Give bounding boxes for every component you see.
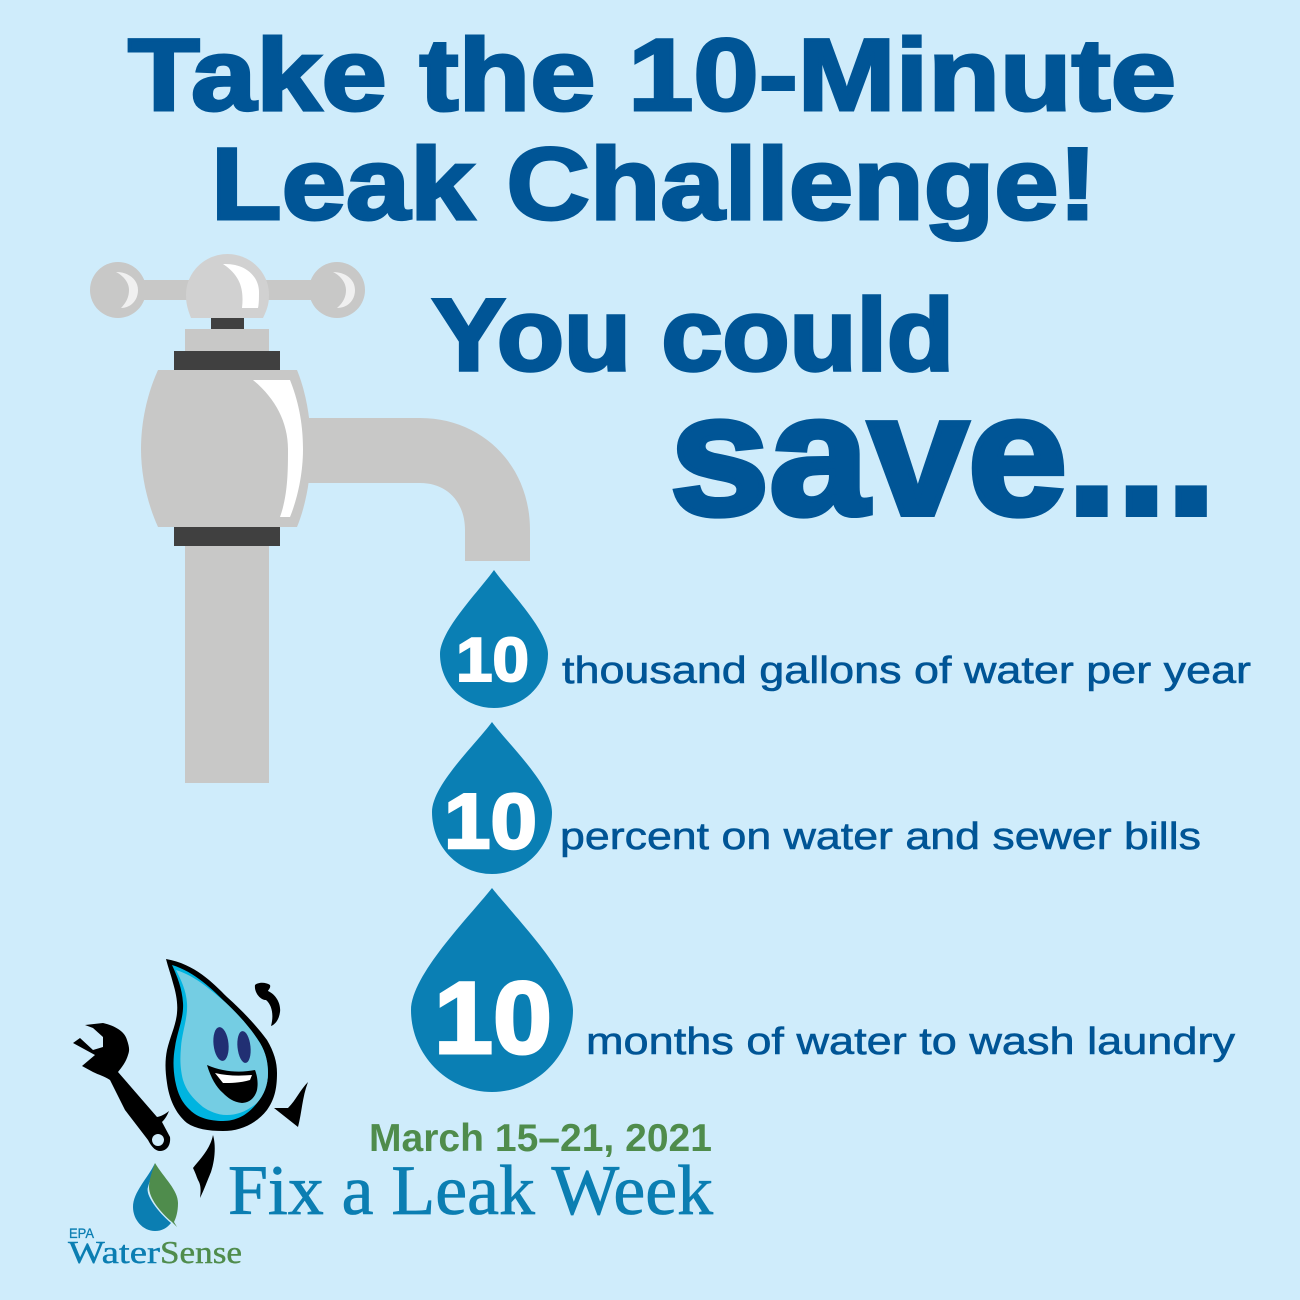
drop: thousand gallons: 10	[456, 626, 529, 695]
heading: you could save: You could	[432, 278, 954, 392]
text: thousand gallons: thousand gallons of water per year	[562, 650, 1251, 692]
text: percent: percent on water and sewer bills	[560, 816, 1201, 858]
text: date: March 15–21, 2021	[369, 1117, 712, 1160]
heading: you could save	[432, 278, 1216, 551]
icon: faucet	[90, 254, 530, 783]
drop: percent	[432, 722, 552, 874]
text: months: months of water to wash laundry	[586, 1021, 1235, 1063]
logo: WaterSense: EPA	[69, 1225, 95, 1241]
mascot	[73, 959, 308, 1198]
heading: you could save: save...	[670, 359, 1216, 551]
logo: WaterSense: Water	[68, 1234, 160, 1270]
title: Leak Challenge!	[211, 127, 1097, 241]
drop: months: 10	[434, 961, 552, 1075]
logo: WaterSense: Sense	[160, 1234, 242, 1270]
drop: months	[411, 888, 573, 1092]
title	[128, 18, 1176, 241]
drop: percent: 10	[444, 777, 537, 865]
title: Take the 10-Minute	[128, 18, 1176, 132]
text: fix a leak week: Fix a Leak Week	[228, 1152, 713, 1230]
logo: WaterSense	[68, 1163, 242, 1270]
drop: thousand gallons	[440, 570, 548, 708]
